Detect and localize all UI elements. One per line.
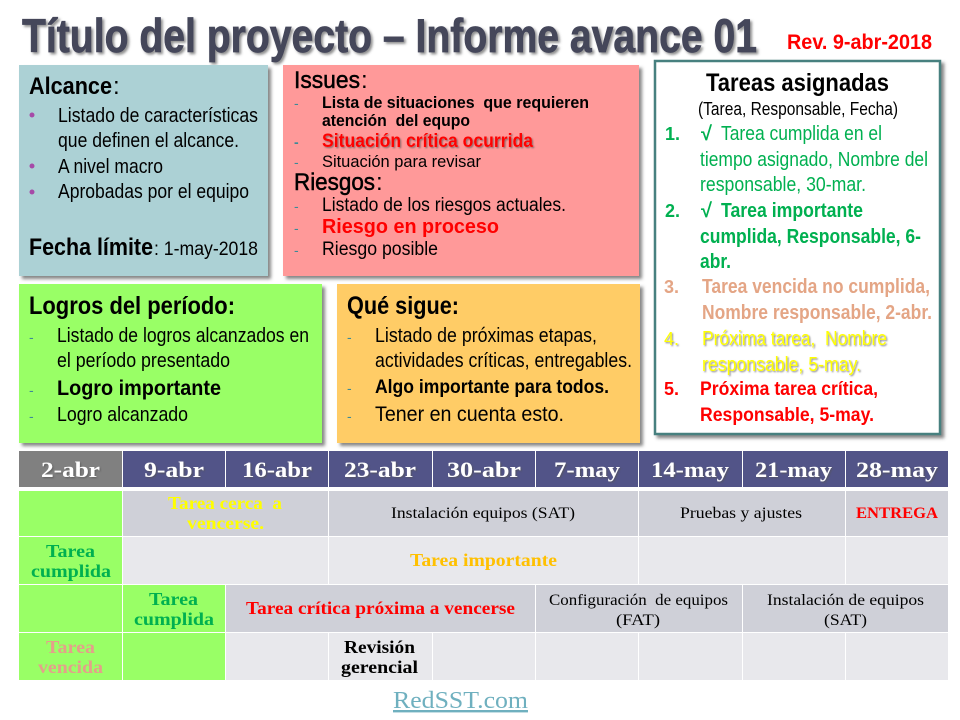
- table row 1: Instalación equipos (SAT): [391, 505, 575, 522]
- table header: dates: 14-may: [651, 457, 729, 482]
- scope list: A nivel macro: [58, 156, 163, 178]
- table row 2: Tarea importante: [410, 550, 557, 570]
- task 3: [664, 276, 932, 324]
- next steps list: Algo importante para todos.: [375, 377, 609, 398]
- task 4: Próxima tarea, Nombre: [702, 328, 887, 350]
- issues list: [294, 93, 589, 171]
- schedule table: [19, 451, 948, 680]
- achievements list: -: [29, 408, 34, 424]
- task 1: Tarea cumplida en el: [721, 123, 882, 145]
- table row 3: Configuración de equipos: [549, 592, 728, 609]
- scope list: Aprobadas por el equipo: [58, 181, 249, 203]
- achievements list: -: [29, 382, 34, 398]
- table header: dates: 28-may: [856, 457, 938, 482]
- table header: dates: 21-may: [755, 457, 832, 482]
- issues list: Situación crítica ocurrida: [322, 131, 533, 152]
- task 4: 4.: [664, 329, 679, 349]
- table row 1: vencerse.: [187, 513, 264, 533]
- task 3: 3.: [664, 277, 679, 297]
- scope list: que definen el alcance.: [58, 130, 239, 152]
- table row 4: Tarea: [46, 637, 95, 657]
- table row 2: [19, 537, 948, 584]
- risks list: -: [294, 198, 299, 214]
- deadline: [29, 234, 258, 261]
- next steps list: -: [347, 380, 352, 396]
- table row 3: Tarea: [149, 589, 198, 609]
- table row 2: Tarea: [46, 541, 95, 561]
- task 2: √: [701, 200, 713, 222]
- scope list: Listado de características: [58, 105, 258, 127]
- risks list: Riesgo en proceso: [322, 216, 499, 238]
- deadline: : 1-may-2018: [154, 239, 258, 260]
- next steps list: -: [347, 408, 352, 424]
- task 1: tiempo asignado, Nombre del: [700, 149, 928, 171]
- task 1: √: [701, 123, 713, 145]
- heading: issues: :: [361, 67, 368, 94]
- heading: que sigue: Qué sigue:: [347, 292, 459, 320]
- table row 1: ENTREGA: [856, 505, 938, 522]
- table header: dates: 23-abr: [344, 457, 416, 482]
- table header: dates: 2-abr: [41, 457, 100, 482]
- heading: alcance: :: [113, 73, 120, 100]
- next steps list: actividades críticas, entregables.: [375, 350, 632, 372]
- panel: que sigue: [337, 284, 640, 443]
- achievements list: el período presentado: [57, 350, 230, 372]
- heading: tareas asignadas: Tareas asignadas: [706, 69, 889, 97]
- task 2: abr.: [700, 251, 731, 273]
- deadline: Fecha límite: [29, 234, 153, 261]
- footer link text: RedSST.com: [393, 688, 528, 714]
- issues list: Situación para revisar: [322, 152, 481, 171]
- achievements list: [29, 325, 309, 426]
- table header: dates: 30-abr: [447, 457, 521, 482]
- table row 3: Tarea crítica próxima a vencerse: [246, 598, 515, 618]
- table row 4: [19, 633, 948, 680]
- table header: dates: [19, 451, 948, 487]
- table row 4: Revisión: [344, 637, 415, 657]
- panel: logros del periodo: [19, 284, 322, 443]
- title: Título del proyecto – Informe avance 01: [22, 9, 757, 62]
- scope list: [30, 105, 258, 203]
- issues list: atención del equpo: [322, 111, 470, 130]
- revision date: Rev. 9-abr-2018: [787, 31, 932, 54]
- subheading: (Tarea, Responsable, Fecha): [698, 99, 898, 119]
- task 2: Tarea importante: [721, 200, 863, 222]
- task 5: Responsable, 5-may.: [700, 405, 874, 426]
- table row 3: [19, 585, 948, 632]
- achievements list: -: [29, 329, 34, 345]
- task 4: [664, 328, 887, 376]
- task 3: Tarea vencida no cumplida,: [702, 276, 930, 298]
- table header: dates: 16-abr: [242, 457, 312, 482]
- achievements list: Logro alcanzado: [57, 404, 188, 426]
- task 3: Nombre responsable, 2-abr.: [702, 302, 932, 324]
- achievements list: Logro importante: [57, 377, 221, 400]
- table row 3: (FAT): [616, 612, 660, 629]
- table row 2: cumplida: [31, 561, 111, 581]
- issues list: -: [294, 95, 299, 111]
- heading: riesgos: :: [376, 169, 383, 196]
- risks list: -: [294, 242, 299, 258]
- panel: issues y riesgos: [283, 65, 639, 276]
- task 1: responsable, 30-mar.: [700, 174, 866, 196]
- next steps list: Listado de próximas etapas,: [375, 325, 597, 347]
- heading: logros: Logros del período:: [29, 292, 235, 320]
- table row 4: gerencial: [341, 657, 418, 677]
- table row 4: vencida: [38, 657, 103, 677]
- heading: alcance: Alcance: [29, 73, 112, 100]
- task 5: [664, 379, 878, 426]
- next steps list: [347, 325, 632, 426]
- task 2: cumplida, Responsable, 6-: [700, 226, 921, 248]
- next steps list: -: [347, 329, 352, 345]
- task 1: [665, 123, 928, 196]
- issues list: Lista de situaciones que requieren: [322, 93, 589, 112]
- risks list: [294, 195, 566, 260]
- table row 1: Tarea cerca a: [168, 493, 282, 513]
- issues list: -: [294, 154, 299, 170]
- table header: dates: 7-may: [554, 457, 620, 482]
- task 5: Próxima tarea crítica,: [700, 379, 878, 400]
- heading: riesgos: Riesgos: [294, 169, 375, 196]
- table header: dates: 9-abr: [144, 457, 204, 482]
- task 2: [665, 200, 921, 273]
- risks list: -: [294, 220, 299, 236]
- table row 3: Instalación de equipos: [767, 592, 924, 609]
- task 5: 5.: [664, 379, 679, 399]
- task 2: 2.: [665, 201, 680, 221]
- heading: issues: Issues: [294, 67, 360, 94]
- task 1: 1.: [665, 124, 680, 144]
- risks list: Listado de los riesgos actuales.: [322, 195, 566, 216]
- table row 1: [19, 491, 948, 536]
- table row 3: cumplida: [134, 609, 214, 629]
- task 4: responsable, 5-may.: [702, 354, 861, 376]
- next steps list: Tener en cuenta esto.: [375, 403, 564, 426]
- panel: tareas asignadas: [655, 61, 940, 434]
- panel: alcance: [19, 65, 268, 276]
- issues list: -: [294, 134, 299, 150]
- table row 3: (SAT): [824, 612, 867, 629]
- table row 1: Pruebas y ajustes: [680, 505, 802, 522]
- risks list: Riesgo posible: [322, 239, 438, 260]
- achievements list: Listado de logros alcanzados en: [57, 325, 309, 347]
